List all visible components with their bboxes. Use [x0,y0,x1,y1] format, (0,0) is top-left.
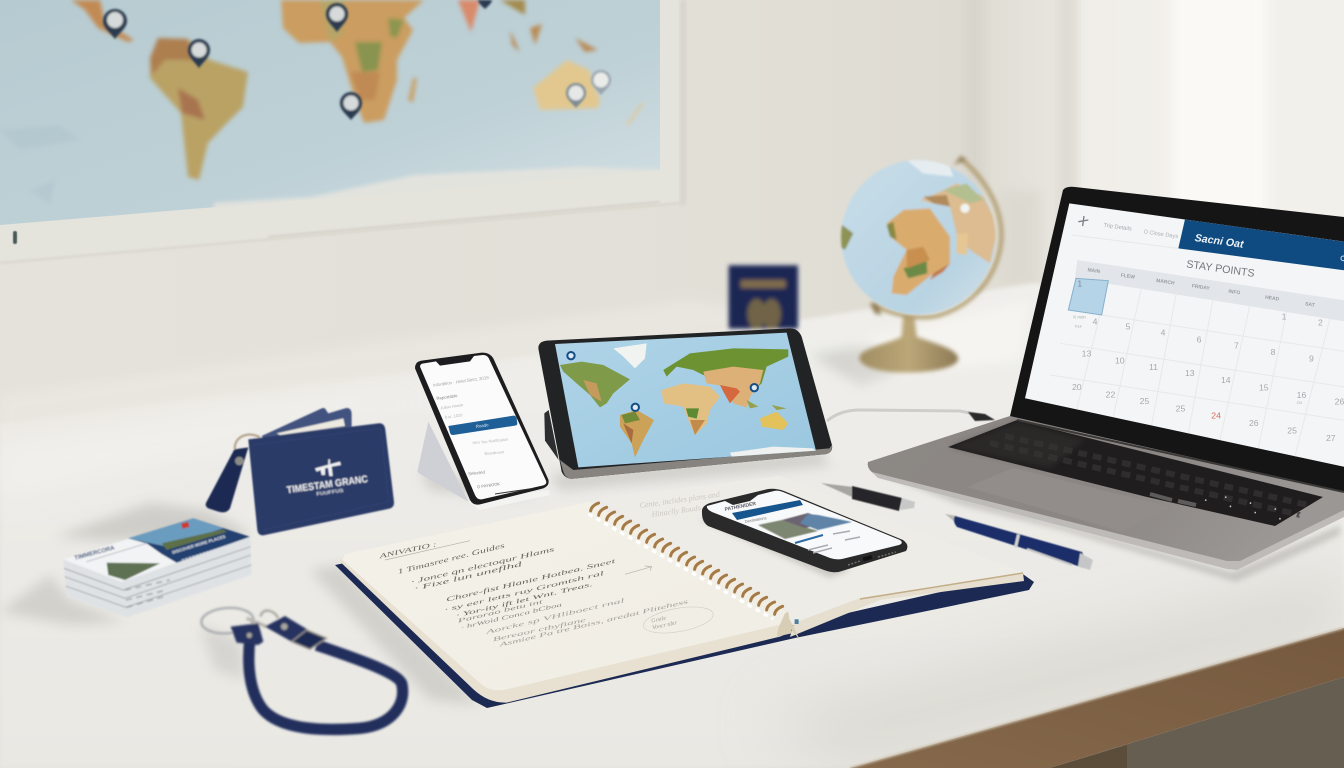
holder logo [315,459,341,476]
circled note: Grstle [651,616,667,625]
calendar title: STAY POINTS [1186,258,1255,280]
calendar header row: INFO [1228,289,1241,296]
handwritten notes: Parorao betu int [455,599,544,625]
map sheet [0,0,660,225]
phone ports [863,555,872,561]
usb cable [827,410,995,421]
notebook inner shade overlay [785,620,800,640]
phone stand [417,422,468,502]
phone screen: Selected [468,470,486,476]
holder flaps [262,408,352,438]
strap tabs [231,616,327,649]
kickstand [544,410,559,460]
key ring [200,606,278,635]
calendar dates: 22 [1106,389,1115,399]
calendar dates: Tour [1075,324,1083,328]
passport [729,265,798,329]
handwritten notes: Bereaor ctbyfiane [492,617,587,643]
highlighted day [1068,278,1108,315]
globe [840,156,1001,373]
laptop [827,187,1344,570]
phone screen: PATHENIDER [724,501,757,513]
left page [339,502,799,703]
tablet body [538,328,832,479]
phone screen [707,491,902,559]
lanyard keychain [200,606,403,729]
calendar dates: 13 [1082,349,1091,359]
leather card holder: FUUFFUS [316,488,345,498]
top card: TIMMERCORA [74,545,116,562]
calendar header row [1075,260,1344,322]
phone screen: Boardroom [484,449,505,456]
calendar dates: 1 [1282,311,1287,321]
app header: Sacni Oat [1194,232,1245,251]
handwritten notes: 1 Timasree ree. Guides [397,541,506,576]
note arrow [625,566,652,574]
calendar dates: 25 [1176,403,1185,413]
app header [1072,216,1344,271]
stack edges [63,537,252,617]
calendar header row: FLEW [1120,273,1135,281]
drop shadows [0,345,1340,705]
calendar dates: 7 [1234,341,1239,351]
phone screen: Julian House [440,402,464,410]
black pen [821,483,915,511]
pin [326,3,348,32]
map pins [103,0,611,120]
calendar header row: MAIN [1087,267,1101,275]
lanyard strap [249,638,403,729]
phone screen: Hire You Notification [472,437,508,445]
calendar header row: MARCH [1156,278,1175,287]
holder text: TIMESTAM GRANC [286,474,369,496]
calendar dates: 14 [1221,375,1231,385]
desk surface [0,283,1344,768]
calendar dates: 4 [1093,317,1098,327]
tablet world map [555,333,817,467]
top card: DISCOVER MORE PLACES [171,534,226,555]
site photos [758,513,852,539]
phone screen: Reportable [436,393,458,401]
calendar dates: 15 [1259,382,1269,392]
tablet [538,328,832,479]
business card stack [63,518,252,617]
phone screen [420,355,546,499]
desk edge: wood strip [850,628,1344,768]
open spiral notebook [335,476,1034,708]
calendar dates: CN [1297,401,1302,405]
notebook back cover [335,563,1034,708]
holder strap [206,435,260,512]
handwritten notes [377,541,690,649]
keyboard [948,420,1323,526]
calendar dates: 27 [1326,433,1336,443]
calendar dates: 25 [1140,396,1149,406]
calendar dates: 5 [1126,321,1131,331]
circled note [641,602,715,638]
calendar dates: 9 [1309,354,1314,364]
calendar dates: 11 [1149,362,1158,372]
trackpad [967,468,1170,532]
pin [188,39,210,68]
right page: Hinaclly Rouds [650,503,701,519]
wall world map [0,0,686,263]
calendar grid [1050,280,1344,457]
calendar dates: 26 [1249,418,1259,428]
site banner [732,500,803,520]
calendar header row: SAT [1305,301,1315,309]
phone button [448,416,517,435]
handwritten notes: · Jonce qn electoqur Hlams [411,546,556,586]
calendar dates [1072,311,1344,443]
handwritten notes: · Yor-ity ift let Wnt. Treas. [456,581,594,619]
handwritten notes: Aorcke sp VHliboect rnal [483,598,626,636]
pin [340,92,362,120]
blue ballpoint pen [945,514,1093,570]
phone screen: Destinations [744,515,767,524]
pin [591,70,611,95]
laptop screen calendar [1025,203,1344,467]
spiral binding [588,503,783,619]
right page [600,476,1024,637]
circled note: Voncr tder [652,620,678,631]
handwritten notes: · Fixe lun uneflhd [414,561,524,593]
calendar dates: 16 [1297,390,1306,400]
globe sphere [840,158,998,315]
calendar dates: 24 [1211,410,1221,420]
holder cover [248,423,394,535]
phone shadow [700,515,850,578]
calendar header row: HEAD [1265,295,1280,303]
calendar dates: 4 [1161,328,1166,338]
site text [795,535,823,543]
calendar dates: 26 [1335,397,1344,407]
calendar dates: 25 [1287,425,1297,435]
leather card holder [206,408,394,535]
calendar header row: FRIDAY [1191,283,1211,292]
laptop lid [1010,187,1344,492]
calendar dates: 8 [1271,347,1276,357]
calendar dates: 20 [1072,382,1082,392]
handwritten notes: ANIVATIO : [377,541,437,561]
top card [63,518,250,582]
app header: O Close Days [1143,229,1179,240]
calendar dates: 10 [1115,355,1125,365]
map frame [0,0,681,263]
standing phone [415,353,550,510]
calendar dates: K mon [1073,315,1086,320]
laptop base [868,415,1344,569]
phone on notebook [700,489,907,578]
phone body [702,489,907,572]
handwritten notes: · hrWoid Conca bCboa [461,602,563,631]
phone screen: O PAYBOOK [477,481,501,489]
handwritten notes: · sy eer letts ruy Gromtsh ral [444,571,605,614]
pin [103,9,127,39]
phone screen: 8 ur. 1010 [444,412,463,420]
pin [566,83,586,108]
phone body [415,353,549,505]
title underline [385,541,470,560]
calendar dates: 2 [1318,318,1323,328]
map continents [70,0,658,207]
phone screen: Infordition · Hotel Strict. 2019 [433,375,490,388]
calendar dates: 6 [1197,334,1202,344]
calendar dates: 13 [1185,368,1195,378]
tablet pins [567,352,575,359]
right page: Cente, inclides plans and [639,490,721,510]
handwritten notes: Asmiee Pa tre Boiss, aredat Plitehess [497,599,690,649]
app header: Trip Details [1103,223,1132,233]
handwritten notes: Chore-fist Hlanie Hotbea. Sneet [446,558,616,604]
globe stand [859,156,1001,373]
pin [478,0,492,9]
highlighted day: 1 [1077,279,1082,289]
phone button: Roado [475,422,489,429]
